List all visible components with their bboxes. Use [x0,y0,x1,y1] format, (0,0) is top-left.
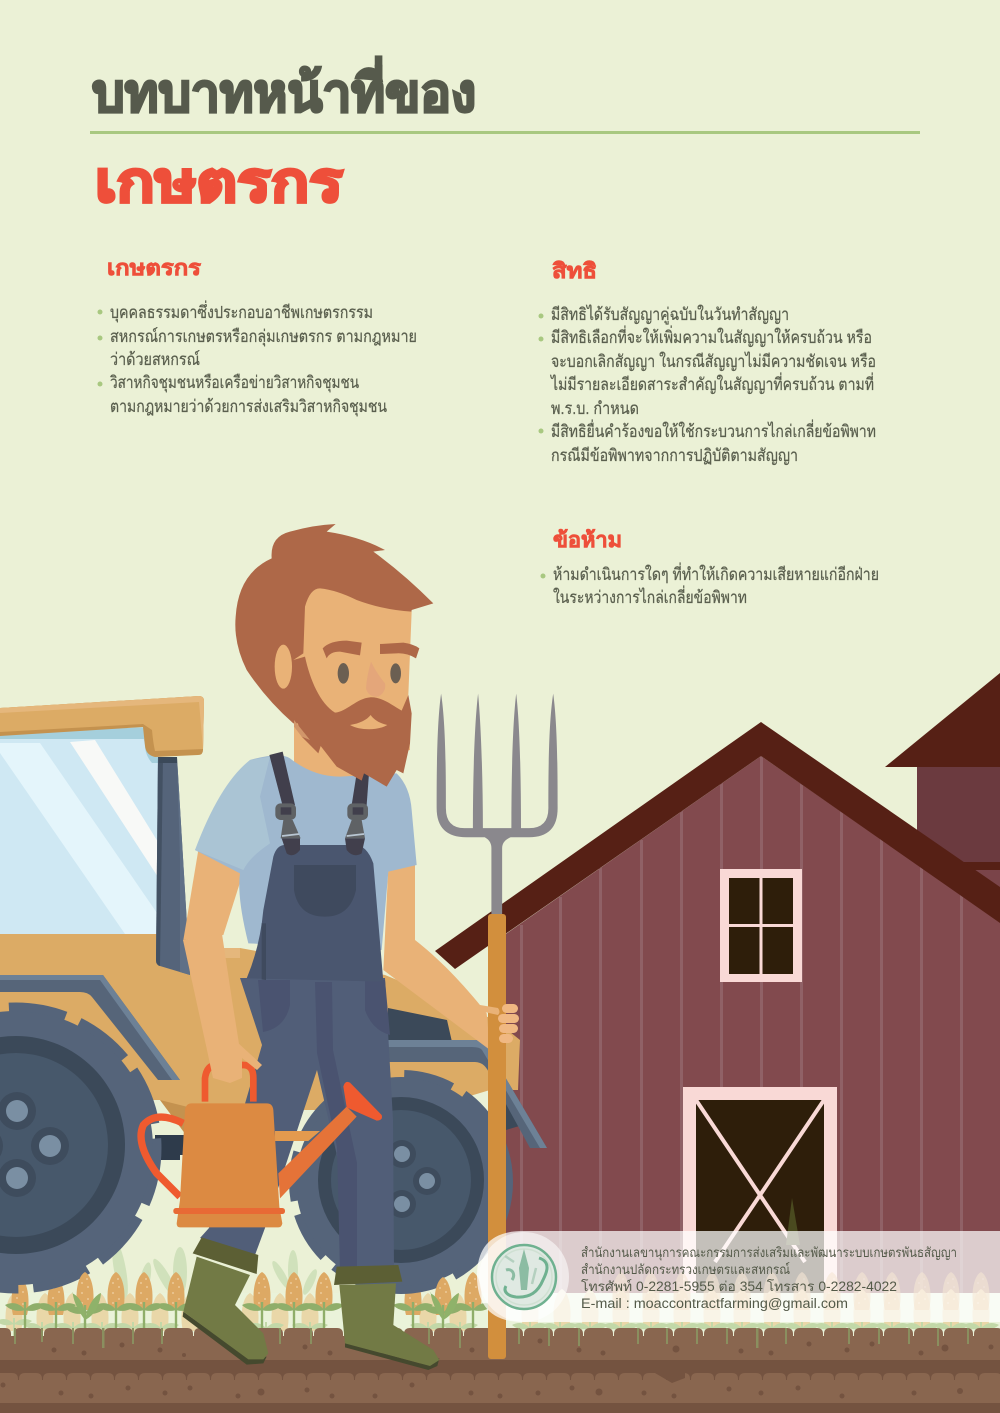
panel: rights: พ.ร.บ. กำหนด [551,399,639,418]
footer contact panel: E-mail : moaccontractfarming@gmail.com [581,1296,848,1311]
panel: prohibitions: ในระหว่างการไกล่เกลี่ยข้อพิพาท [553,585,747,607]
footer contact panel: โทรศัพท์ 0-2281-5955 ต่อ 354 โทรสาร 0-2282-4022 [581,1278,897,1294]
panel: rights: มีสิทธิเลือกที่จะให้เพิ่มความในสัญญาให้ครบถ้วน หรือ [551,325,872,347]
panel: rights [538,260,876,465]
panel: rights: ไม่มีรายละเอียดสาระสำคัญในสัญญาที่ครบถ้วน ตามที่ [549,372,874,394]
tractor body [0,933,520,1133]
beard [293,657,412,787]
panel: farmer definition: วิสาหกิจชุมชนหรือเครือข่ายวิสาหกิจชุมชน [110,373,359,393]
mouth [350,715,387,729]
face [293,588,412,767]
panel: prohibitions: ห้ามดำเนินการใดๆ ที่ทำให้เกิดความเสียหายแก่อีกฝ่าย [553,562,879,584]
panel: rights: กรณีมีข้อพิพาทจากการปฏิบัติตามสัญญา [551,446,798,465]
panel: prohibitions: ข้อห้าม [553,528,622,552]
icon: ministry seal [492,1245,556,1309]
cab roof [0,696,204,757]
rear wheel [0,1007,157,1289]
panel: farmer definition: บุคคลธรรมดาซึ่งประกอบอาชีพเกษตรกรรม [110,300,373,323]
rear fender [0,975,180,1080]
silo tower [885,673,1000,896]
seedlings [0,1292,999,1348]
panel: rights: สิทธิ [552,260,597,283]
pitchfork [437,694,558,1359]
tractor [0,696,547,1290]
barn window [720,869,802,982]
panel: farmer definition: ว่าด้วยสหกรณ์ [110,350,200,369]
eyebrows [323,641,362,658]
front fender [388,1040,547,1148]
panel: rights: มีสิทธิได้รับสัญญาคู่ฉบับในวันทำสัญญา [551,304,789,325]
ear [275,645,292,689]
title: บทบาทหน้าที่ของ [92,57,476,123]
boots [183,1237,439,1370]
soil [0,1328,1000,1413]
panel: farmer definition: เกษตรกร [107,257,202,280]
cab pillar [156,757,190,975]
panel: farmer definition: ตามกฎหมายว่าด้วยการส่งเสริมวิสาหกิจชุมชน [110,397,387,417]
cab window [0,727,158,934]
overalls bib [247,845,383,982]
straps and buckles [269,752,369,855]
panel: farmer definition: สหกรณ์การเกษตรหรือกลุ่มเกษตรกร ตามกฎหมาย [110,327,417,347]
neck [294,700,400,800]
farmer hand on can [207,1042,262,1083]
t-shirt [195,755,417,950]
nose [366,662,385,697]
head [235,524,433,787]
panel: rights: จะบอกเลิกสัญญา ในกรณีสัญญาไม่มีความชัดเจน หรือ [551,351,876,371]
eyes [338,663,349,684]
footer contact panel: สำนักงานปลัดกระทรวงเกษตรและสหกรณ์ [581,1261,790,1277]
trousers [200,978,394,1272]
panel: prohibitions [540,528,879,607]
footer contact panel [477,1231,1000,1322]
front wheel [293,1074,509,1290]
arms [183,850,490,1050]
farmer [183,524,490,1370]
panel: farmer definition [98,257,417,417]
watering can [141,1065,382,1227]
title [90,57,920,213]
panel: rights: มีสิทธิยื่นคำร้องขอให้ใช้กระบวนการไกล่เกลี่ยข้อพิพาท [551,419,876,441]
title: เกษตรกร [95,151,344,213]
barn [435,722,1000,1330]
hair back [235,524,433,723]
ground strip and corn behind tractor [0,1239,1000,1333]
barn door [683,1087,837,1330]
hand on pitchfork [480,1004,519,1043]
corn row [76,1272,990,1315]
